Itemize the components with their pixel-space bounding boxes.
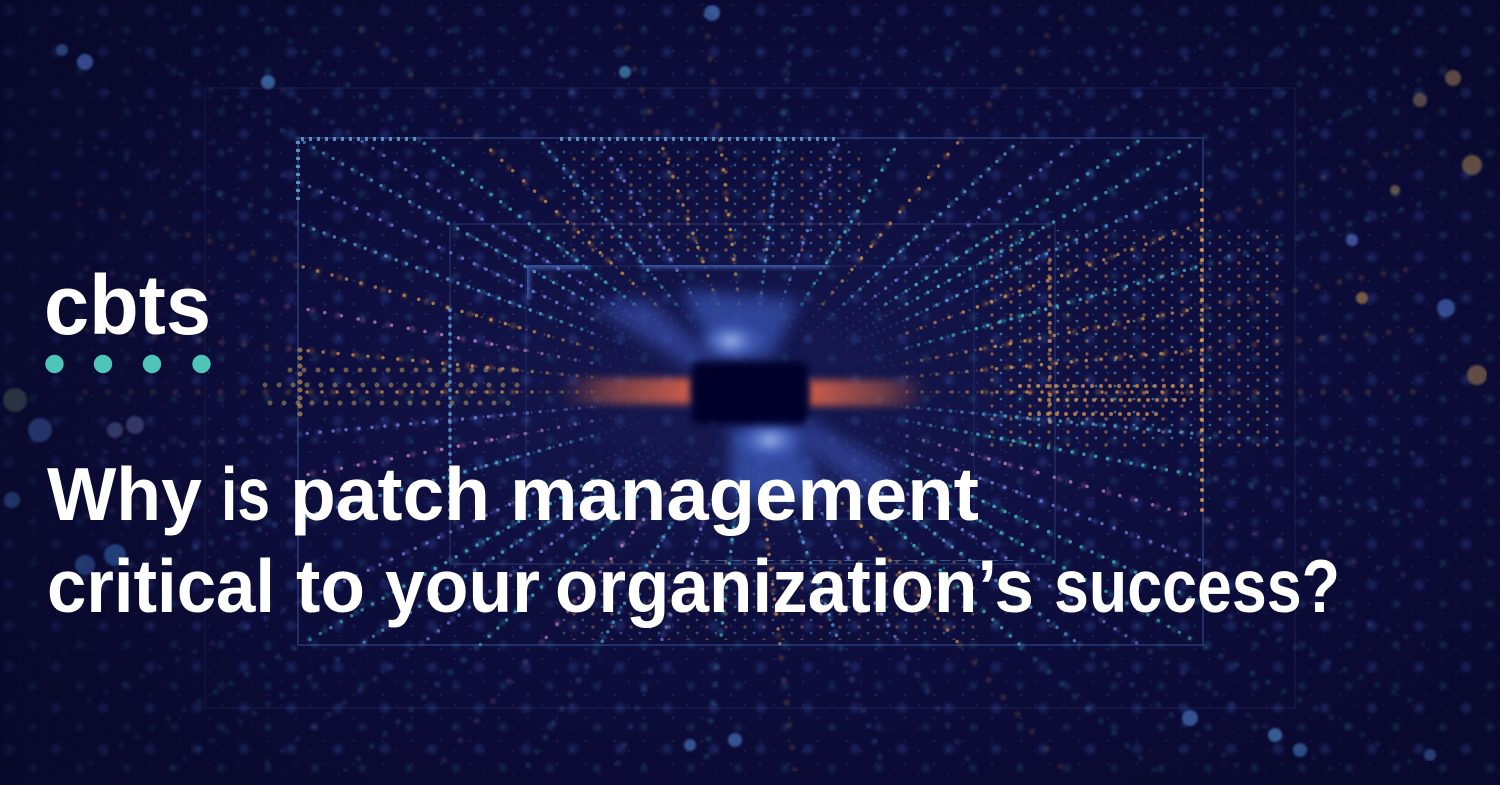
title: Why: [47, 452, 202, 536]
title: management: [510, 452, 979, 536]
title: success?: [1054, 544, 1340, 628]
title: to: [296, 544, 365, 628]
title: your: [385, 544, 540, 628]
title: is: [221, 452, 270, 536]
logo dots: [45, 355, 211, 373]
title: [47, 452, 1340, 628]
tunnel rays and glow: [560, 290, 926, 500]
title: critical: [47, 544, 275, 628]
title: organization’s: [555, 544, 1034, 628]
logo: cbts: cbts: [44, 258, 211, 352]
tunnel frames: [205, 88, 1335, 708]
title: patch: [290, 452, 490, 536]
